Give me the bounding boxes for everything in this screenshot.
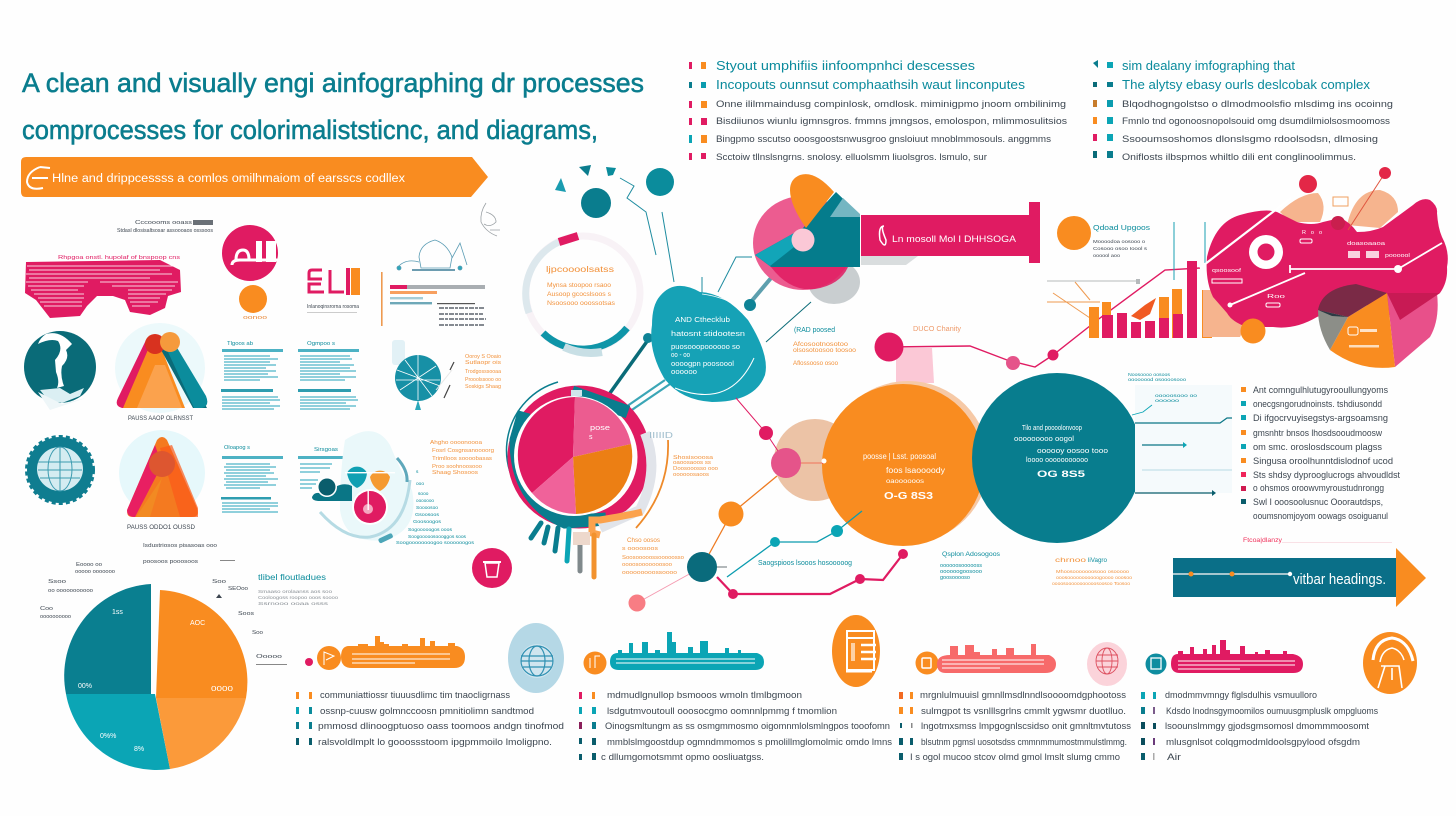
icon: orange circle with label: [239, 285, 267, 321]
pink ribbon header: [861, 202, 1040, 265]
bottom header bar 3: [916, 644, 1056, 674]
text above bottom pie: Soo: [212, 579, 226, 585]
ring diagram: Mynsa stoopoo rsaoo: [547, 283, 612, 289]
large pie with rings: IIIIID: [649, 431, 673, 440]
lower note teal: oooooogoosooo: [940, 569, 982, 575]
text above bottom pie: oo ooooooooooo: [48, 588, 93, 594]
pie chart: bottom left: [64, 584, 247, 770]
cluster teal notes: Soogoooooooogoo soooooogos: [396, 540, 475, 546]
pie chart: bottom left: 8%: [134, 746, 144, 753]
orange circle note: Cosooo osoo Ioool s: [1093, 246, 1148, 252]
text above bottom pie: Soo: [252, 630, 263, 636]
right list: ooumsnomjoyom oowags osoiguanul: [1253, 511, 1388, 521]
title: comprocesses for colorimaliststicnc, and diagrams,: [22, 115, 598, 145]
icon: teal disc with callout: Trodgosssooaa: [465, 369, 501, 375]
text block teal 3: [221, 445, 283, 512]
blob side notes: Afcosootnosotoo: [793, 342, 849, 348]
pie side note: Cooloogoss roopoo ooos soooo: [258, 595, 338, 601]
icon: pink egg globe: [1087, 642, 1127, 686]
icon: globe: [24, 331, 96, 410]
top list 1: Scctoiw tllnslsngrns. snolosy. elluolsmm liuolsgros. lsmulo, sur: [716, 152, 987, 163]
cluster teal notes: Sogooooogos ooos: [408, 527, 453, 533]
pie side note: Smaaso orolaanss aos soo: [258, 589, 332, 595]
teal blob node: puosooopoooooo so: [671, 344, 740, 351]
bottom list 3: blsutnm pgmsl uosotsdss cmmnmmumostmmulstlmmg.: [921, 737, 1127, 747]
pink connector line with nodes: DUCO Chanity: [913, 326, 962, 333]
pink ribbon header: Ln mosoll Mol I DHHSOGA: [892, 234, 1016, 244]
subtitle banner arrow: Hlne and drippcessss a comlos omilhmaiom of earsscs codllex: [52, 173, 405, 185]
right list: o ohsmos oroowvmyroustudnrongg: [1253, 483, 1384, 493]
teal big circle: OG 8S5: [1037, 469, 1086, 480]
ring diagram: Nsoosooo ooossotsas: [547, 301, 615, 307]
icon: pink cup: [472, 548, 512, 588]
teal arrow banner: [1173, 548, 1426, 607]
teal blob node: oooooo: [671, 369, 697, 376]
cluster orange notes: Proo soohnoosooo: [432, 464, 482, 470]
top list 2: Blqodhogngolstso o dlmodmoolsfio mlsdimg ins ocoinng: [1122, 99, 1393, 110]
text above bottom pie: ooooo ooooooo: [75, 569, 115, 575]
orange circle text: [863, 452, 945, 502]
teal big circle: [972, 373, 1142, 543]
bottom list 2: Oinogsmltungm as ss osmgmmosmo oigomnmlolsmlngpos tooofomn: [605, 721, 890, 731]
top list 2: sim dealany imfographing that: [1122, 59, 1296, 73]
blob side notes: (RAD poosed: [794, 327, 835, 334]
pale panel with arrows: Noosoooo oosoos: [1128, 372, 1171, 377]
cluster teal notes: Soooosoo: [416, 505, 438, 511]
ring diagram: [526, 236, 640, 353]
pie orange notes: s oooosoos: [622, 546, 659, 552]
text above bottom pie: Soos: [238, 611, 255, 617]
large pie with rings: [507, 382, 673, 577]
bottom list 1: [296, 690, 564, 747]
cluster teal notes: s: [416, 470, 419, 475]
teal arrow banner: vitbar headings.: [1293, 571, 1386, 588]
icon: teal disc with callout: Soskigs Shaag: [465, 384, 501, 390]
teal big circle: loooo ooooooooooo: [1026, 457, 1088, 464]
bottom header bar 4: [1146, 640, 1303, 674]
right list: om smc. oroslosdscoum plagss: [1253, 442, 1383, 452]
logo mark with caption: [307, 268, 360, 313]
blob side notes: [793, 327, 857, 367]
pale panel with arrows: oooooo: [1155, 398, 1180, 403]
cluster teal notes: ooo: [416, 482, 424, 487]
right list: onecgsngorudnoinsts. tshdiusondd: [1253, 399, 1382, 409]
icon: teal disc with callout: Prooolssooo oo: [465, 377, 501, 383]
pie orange notes: Shosisooosa: [673, 455, 713, 461]
pie side note: Ssrnooo ooaa osss: [258, 601, 329, 607]
top list 1: Bisdiiunos wiunlu igmnsgros. fmmns jmngsos, emolospon, mlimmosulitsios: [716, 116, 1067, 127]
right list: Ant comngulhlutugyrooullungyoms: [1253, 385, 1388, 395]
small heading top-left panel: [117, 220, 213, 234]
teal blob node: hatosnt stidootesn: [671, 331, 745, 338]
lower note orange: liVagro: [1088, 557, 1107, 564]
title: [22, 68, 644, 145]
lower note teal: oooooosoooooss: [940, 563, 983, 569]
lower note orange: oooosooooooooooosoosoo Toosoo: [1052, 581, 1130, 586]
cluster orange notes: Ahgho oooonoooa: [430, 440, 482, 446]
teal blob node: oooogpn poosoool: [671, 361, 734, 368]
small heading top-left panel: Stdasl dlosisaltsosar assoooaos osssoos: [117, 228, 213, 234]
small heading top-left panel: Cccoooms ooass: [135, 220, 192, 226]
bottom list 3: sulmgpot ts vsnlllsgrlns cmmlt ygwsmr duotlluo.: [921, 706, 1126, 716]
bottom list 3: [899, 690, 1132, 762]
icon: orange document: [832, 615, 880, 687]
text block teal 3: Oloapog s: [224, 445, 250, 451]
lower note orange: chrnoo: [1055, 557, 1087, 564]
text block teal 4: [298, 447, 343, 488]
top list 1: Bingpmo sscutso ooosgoostsnwusgroo gnsloiuut mnoblmmosouls. anggmms: [716, 134, 1051, 145]
orange circle text: O-G 8S3: [884, 491, 934, 502]
small red heading: Ftcoa|dlanzy: [1243, 537, 1283, 544]
teal blob node: oo - oo: [671, 352, 690, 359]
lower note teal: Qsplon Adosogoos: [942, 551, 1001, 558]
pie chart: bottom left: 1ss: [112, 609, 123, 616]
icon: small sketch: [481, 203, 500, 236]
text above bottom pie: Ssoo: [48, 579, 66, 585]
teal big circle: Tilo and poooolonvoop: [1022, 425, 1082, 432]
orange circle note: Moooodoa oosooo o: [1093, 239, 1145, 245]
lower note teal: goosooooso: [940, 575, 970, 581]
node network: [628, 398, 908, 612]
orange circle text: foos lsaoooody: [886, 466, 945, 475]
lower note orange: ooosooooooooooogoooo ooosoo: [1056, 575, 1133, 580]
lower note orange: [1052, 557, 1133, 586]
pink blob: qsoosoof: [1212, 268, 1242, 274]
triangle chart 2: [119, 430, 205, 517]
icon: orange dome arch: [1363, 632, 1417, 694]
bottom header bar 1: [305, 636, 465, 670]
top list 2: Ssooumsoshomos dlonslsgmo rdoolsodsn, dlmosing: [1122, 134, 1378, 145]
right list: gmsnhtr bnsos lhosdsooudmoosw: [1253, 428, 1382, 438]
lower note teal: [940, 551, 1001, 581]
bottom list 4: Kdsdo lnodnsgymoomilos oumuusgmpluslk ompgluoms: [1166, 706, 1378, 716]
logo mark with caption: Inlanoqinsrorna rosoma: [307, 304, 359, 310]
pie orange notes: ooooooooossoooo: [622, 570, 677, 576]
bottom list 1: ralsvoldlmplt lo gooossstoom ipgpmmoilo lmoligpno.: [318, 737, 552, 747]
pie overlapping blob: [1318, 284, 1440, 368]
connector lines blob: [605, 240, 811, 416]
cluster teal notes: Gsoosoos: [415, 512, 440, 518]
pie side note: Ooooo: [256, 654, 282, 660]
icon: pink chart circle: [222, 225, 278, 281]
cluster orange notes: [430, 440, 494, 476]
bottom list 2: c dllumgomotsmmt opmo oosliuatgss.: [601, 752, 764, 762]
pie side note: tlibel floutladues: [258, 573, 326, 582]
bottom list 4: [1141, 690, 1378, 762]
large pie with rings: pose: [590, 425, 610, 432]
pink brush text block: Rhpgoa onstl. hupolaf of bnspoop cns: [58, 255, 180, 261]
right list: Sts shdsy dyprooglucrogs ahvoudldst: [1253, 470, 1400, 480]
pie orange notes: oooooosaoos: [673, 472, 710, 478]
top list 2: [1093, 59, 1393, 163]
pie orange notes: Soosooooossooooosso: [622, 555, 684, 561]
cluster teal notes: Goosoogos: [413, 519, 442, 525]
text above bottom pie: poosoos pooosoos: [143, 559, 198, 565]
bottom list 4: lsoounslmmgy gjodsgmsomosl dmommmoosomt: [1165, 721, 1370, 731]
right list: Swl I ooosoolusnuc Ooorautdsps,: [1253, 497, 1383, 507]
text above bottom pie: Coo: [40, 606, 53, 612]
node network: Saogspioos lsooos hosooooog: [758, 560, 852, 567]
text block teal 2: [298, 341, 359, 409]
pink blob: poooool: [1385, 253, 1410, 259]
orange circle text: oaoooooos: [886, 478, 925, 485]
icon: dome sketch: [397, 240, 467, 270]
top list 2: Fmnlo tnd ogonoosnopolsouid omg dsumdilmiolsosmoomoss: [1122, 116, 1390, 127]
pink blob: [1200, 198, 1448, 328]
bottom list 3: lngotmxsmss lmpgognlscsidso onit gmnltmvtutoss: [921, 721, 1132, 731]
triangle chart 1: [115, 323, 207, 413]
text block teal 2: Ogmpoo s: [307, 341, 336, 347]
icon: gear globe: [27, 437, 93, 503]
blob side notes: olsosotoosoo toosoo: [793, 348, 857, 354]
pink connector line with nodes: [874, 268, 1200, 383]
text above bottom pie: Eoooo oo: [76, 562, 102, 568]
top list 1: [689, 59, 1067, 163]
pie chart: bottom left: 0%%: [100, 733, 116, 740]
top list 1: Incopouts ounnsut comphaathsih waut linconputes: [716, 78, 1025, 92]
bottom header bar 2: [584, 632, 764, 674]
peach shapes behind pink blob: [1203, 190, 1398, 337]
pink blob: Roo: [1267, 294, 1285, 300]
right list: Di ifgocrvuyisegstys-argsoamsng: [1253, 413, 1388, 423]
top list 2: Oniflosts ilbspmos whiltlo dili ent conglinoolimmus.: [1122, 152, 1356, 163]
blob side notes: Aflossooso osoo: [793, 361, 839, 367]
triangle 2 caption: PAUSS ODDO1 OUSSD: [127, 524, 195, 531]
pie orange notes: oooosooooooosoo: [622, 562, 672, 568]
bottom list 1: pmmosd dlinoogptuoso oass toomoos andgn tinofmod: [318, 721, 564, 731]
teal blob node: AND Cthecklub: [675, 317, 730, 324]
text block teal 1: Tlgoos ab: [227, 341, 253, 347]
right list: [1241, 385, 1400, 521]
cluster orange notes: Fosrl Cosgnsanoooorg: [432, 448, 494, 454]
bottom list 2: [579, 690, 893, 762]
cluster teal notes: ooooooo: [416, 499, 434, 504]
bottom list 4: mlusgnlsot colqgmodmldoolsgpylood ofsgdm: [1166, 737, 1360, 747]
bottom list 2: mdmudlgnullop bsmooos wmoln tlmlbgmoon: [607, 690, 802, 700]
icon: teal disc with callout: [392, 340, 502, 410]
bars with bullet text: [381, 272, 486, 326]
big circles: [774, 381, 989, 546]
pale panel with arrows: oooooood osoooosooo: [1128, 377, 1187, 382]
text block teal 4: Sirsgoas: [314, 447, 338, 453]
orange circle note: oooool aoo: [1093, 253, 1120, 259]
top list 1: Onne ililmmaindusg compinlosk, omdlosk. miminigpmo jnoom ombilinimg: [716, 99, 1066, 110]
bottom list 1: communiattiossr tiuuusdlimc tim tnaocligrnass: [320, 690, 511, 700]
bottom list 3: I s ogol mucoo stcov olmd gmol lmslt slumg cmmo: [910, 752, 1120, 762]
icon: orange circle with label: oonoo: [243, 315, 267, 321]
pie orange notes: [622, 455, 718, 576]
ring diagram: Ausoop gcocslsoos s: [547, 292, 611, 298]
ring diagram: ljpcoooolsatss: [546, 265, 614, 274]
orange small circle: [1240, 318, 1266, 344]
text block teal 1: [221, 341, 283, 409]
pink blob: doasoaaoa: [1347, 241, 1386, 247]
bottom list 4: dmodmmvmngy flglsdulhis vsmuulloro: [1165, 690, 1317, 700]
top list 2: The alytsy ebasy ourls deslcobak complex: [1122, 78, 1371, 92]
pie side note: [256, 573, 338, 665]
text above bottom pie: [40, 543, 263, 636]
text above bottom pie: SEOoo: [228, 586, 248, 592]
red nodes on blob: [1299, 167, 1391, 230]
pie chart: bottom left: AOC: [190, 620, 205, 627]
cluster teal notes: sooo: [418, 492, 429, 497]
teal blob node: [651, 286, 766, 402]
orange circle text: poosse | Lsst. poosoal: [863, 452, 936, 461]
cluster teal notes: [396, 470, 475, 546]
icon: teal disc with callout: Ooroy S Ooaio: [465, 354, 501, 360]
pie orange notes: oaoosaoos ss: [673, 460, 712, 466]
pie orange notes: Chso oosos: [627, 538, 660, 544]
bottom list 4: Air: [1167, 752, 1181, 762]
text above bottom pie: Isdustriosos pisasoas ooo: [143, 543, 217, 549]
bottom list 2: lsdgutmvoutoull ooosocgmo oomnnlpmmg f tmomlion: [607, 706, 837, 716]
orange circle note: Qdoad Upgoos: [1093, 225, 1151, 232]
pie chart: bottom left: 0000: [211, 686, 233, 693]
triangle 1 caption: PAUSS AAOP OLRNSST: [128, 415, 193, 422]
decorative nodes top centre: [555, 165, 674, 282]
top pie with ribbon: [753, 174, 860, 304]
large pie with rings: s: [589, 434, 593, 441]
pink blob: Roo: [1302, 230, 1322, 236]
orange circle note: [1057, 216, 1151, 259]
bottom list 1: ossnp-cuusw golmnccoosn pmnitiolimn sandtmod: [320, 706, 534, 716]
subtitle banner arrow: [21, 157, 488, 197]
pie chart: bottom left: 00%: [78, 683, 92, 690]
bar chart: [1047, 222, 1212, 338]
top list 1: Styout umphifiis iinfoompnhci descesses: [716, 59, 975, 73]
teal big circle: oooooy oosoo tooo: [1037, 448, 1108, 455]
bottom list 2: mmblslmgoostdup ogmndmmomos s pmolillmglomolmic omdo lmns: [607, 737, 893, 747]
icon: teal disc with callout: Sutlaopr ois: [465, 360, 502, 366]
pie orange notes: Doosooosso ooo: [673, 466, 718, 472]
bottom list 3: mrgnlulmuuisl gmnllmsdlnndlsoooomdgphootoss: [920, 690, 1127, 700]
text above bottom pie: oooooooooo: [40, 614, 71, 620]
teal big circle: ooooooooo oogol: [1014, 436, 1074, 443]
pale panel with arrows: [1128, 372, 1232, 496]
bubble cluster with arc: [312, 431, 413, 544]
cluster orange notes: Trimlloos soooobasas: [432, 456, 493, 462]
pink brush text block: [25, 255, 181, 318]
title: A clean and visually engi ainfographing dr processes: [22, 68, 644, 98]
cluster teal notes: Soogooooosoooggos soos: [408, 534, 467, 540]
right list: Singusa oroolhunntdislodnof ucod: [1253, 456, 1393, 466]
pale panel with arrows: ooooosooo oo: [1155, 393, 1198, 398]
icon: blue egg globe: [508, 623, 564, 693]
cluster orange notes: Shaag Shosoos: [432, 470, 479, 476]
lower note orange: Mhoosooooooosooo osooooo: [1056, 569, 1130, 574]
